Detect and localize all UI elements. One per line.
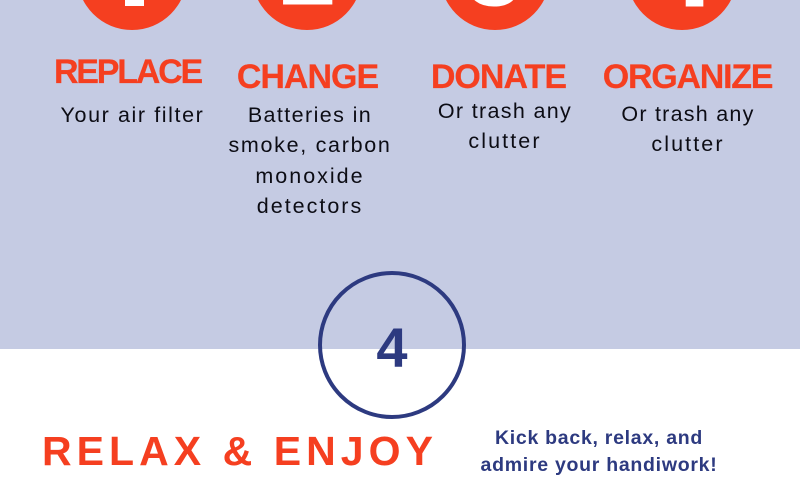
- badge: step 4 outlined circle: [320, 273, 464, 417]
- badge: circle 4: [627, 0, 737, 30]
- numbered circles and step 4 badge: [83, 0, 731, 419]
- text: relax detail: admire your handiwork!: [481, 454, 717, 476]
- badge: circle 2: [252, 0, 362, 30]
- text: change detail: smoke, carbon: [228, 133, 392, 157]
- panel: lavender background: [0, 0, 800, 349]
- text: change detail: [228, 103, 392, 218]
- text: organize detail: Or trash any: [621, 102, 755, 126]
- text: donate detail: Or trash any: [438, 98, 572, 122]
- text: relax detail: Kick back, relax, and: [495, 427, 703, 449]
- badge: circle 3: [440, 0, 550, 30]
- text: relax detail: [481, 427, 717, 476]
- heading: donate: DONATE: [431, 58, 566, 96]
- text: replace detail: Your air filter: [61, 103, 204, 127]
- heading: change: CHANGE: [237, 58, 378, 96]
- heading: relax and enjoy: RELAX & ENJOY: [42, 428, 438, 474]
- badge: step 4 outlined circle: 4: [376, 316, 408, 379]
- text: donate detail: clutter: [468, 129, 542, 153]
- badge: circle 1: [83, 0, 181, 30]
- text: organize detail: clutter: [651, 132, 725, 156]
- text: organize detail: [621, 102, 755, 156]
- heading: organize: ORGANIZE: [603, 58, 772, 96]
- text: change detail: monoxide: [255, 164, 365, 188]
- text: change detail: Batteries in: [248, 103, 372, 127]
- text: change detail: detectors: [257, 194, 363, 218]
- text: donate detail: [438, 98, 572, 153]
- heading: replace: REPLACE: [54, 53, 201, 91]
